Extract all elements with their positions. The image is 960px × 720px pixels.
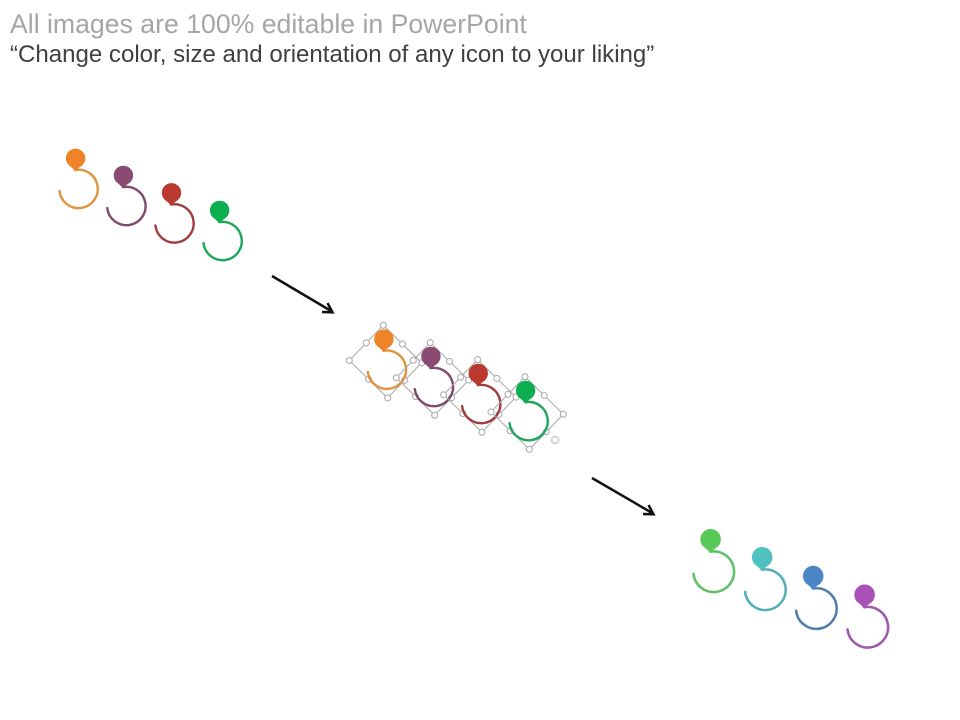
subtitle: “Change color, size and orientation of any icon to your liking” — [10, 41, 654, 68]
icon: red pin — [155, 183, 194, 243]
icon: rotate handle — [552, 436, 558, 444]
icon: light green pin — [694, 529, 734, 592]
icon group: selected icons with handles — [346, 322, 566, 452]
icon: violet pin — [848, 584, 888, 648]
title: All images are 100% editable in PowerPoint — [10, 9, 527, 39]
icon: teal pin — [745, 547, 786, 610]
icon: red pin with selection box — [441, 357, 519, 435]
icon group: recoloured row — [694, 529, 888, 648]
icon: green pin with selection box — [488, 374, 566, 452]
arrow: first to selected — [272, 276, 332, 312]
icon: blue pin — [796, 566, 837, 629]
icon: plum pin — [107, 166, 146, 225]
arrow: selected to recoloured — [592, 478, 654, 514]
icon: orange pin with selection box — [346, 322, 425, 401]
icon: plum pin with selection box — [393, 340, 472, 418]
icon: orange pin — [59, 149, 98, 208]
icon: green pin — [204, 201, 242, 260]
icon group: first row — [59, 149, 242, 260]
